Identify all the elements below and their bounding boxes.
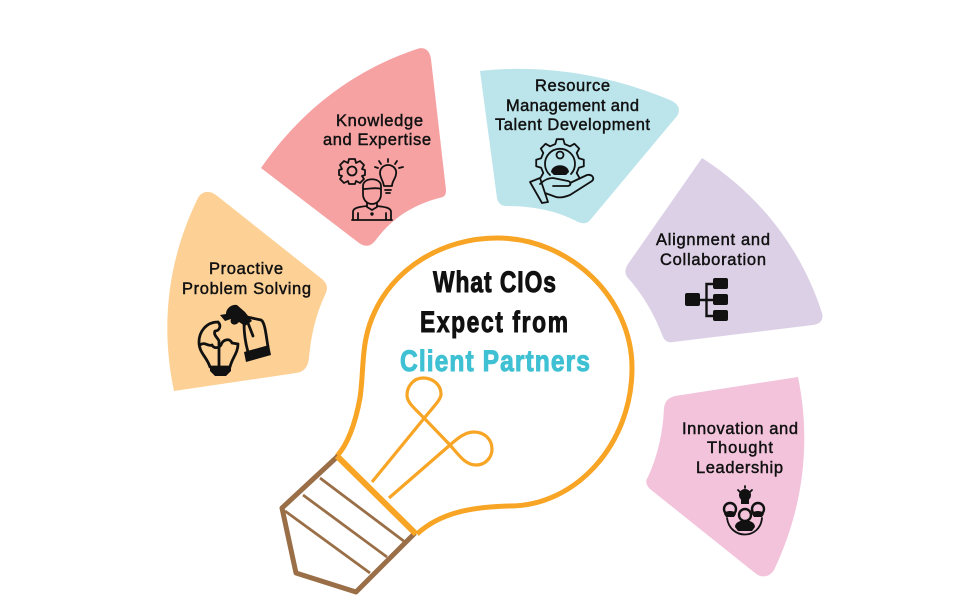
- label: knowledge and expertise: Knowledge: [336, 112, 423, 130]
- label: resource management and talent development: Talent Development: [495, 116, 650, 134]
- label: knowledge and expertise: [323, 112, 431, 149]
- title: What CIOs: [433, 265, 556, 299]
- panel: innovation and thought leadership: [646, 377, 804, 576]
- label: innovation and thought leadership: Thought: [707, 439, 773, 457]
- title: Expect from: [420, 305, 568, 339]
- label: innovation and thought leadership: Innovation and: [682, 420, 798, 438]
- panel: proactive problem solving: [167, 192, 327, 391]
- title: [400, 265, 590, 378]
- title: Client Partners: [400, 344, 590, 378]
- filament: [372, 378, 492, 498]
- bulb collar: [337, 456, 416, 534]
- panel: alignment and collaboration: [625, 158, 823, 342]
- panel: knowledge and expertise: [261, 48, 446, 246]
- light bulb: [282, 238, 632, 592]
- bulb outline: [337, 238, 632, 534]
- label: alignment and collaboration: Alignment and: [656, 231, 770, 249]
- screw base: [282, 456, 415, 592]
- icon: person with gear and bulb: [339, 159, 403, 220]
- icon: puzzle bulb and hand: [199, 305, 271, 376]
- label: innovation and thought leadership: [682, 420, 798, 477]
- icon: hierarchy diagram: [685, 278, 728, 321]
- label: resource management and talent development: Resource: [535, 77, 610, 95]
- label: proactive problem solving: Problem Solving: [182, 280, 311, 298]
- panel: resource management and talent development: [480, 69, 679, 223]
- icon: gear and person in hand: [530, 139, 593, 203]
- label: resource management and talent development: [495, 77, 650, 134]
- label: proactive problem solving: [182, 260, 311, 298]
- icon: team with idea bulb: [724, 486, 764, 534]
- label: alignment and collaboration: [656, 231, 770, 269]
- label: knowledge and expertise: and Expertise: [323, 131, 431, 149]
- label: innovation and thought leadership: Leadership: [696, 459, 783, 477]
- label: proactive problem solving: Proactive: [209, 260, 283, 278]
- label: alignment and collaboration: Collaboration: [660, 251, 766, 269]
- label: resource management and talent development: Management and: [506, 97, 639, 115]
